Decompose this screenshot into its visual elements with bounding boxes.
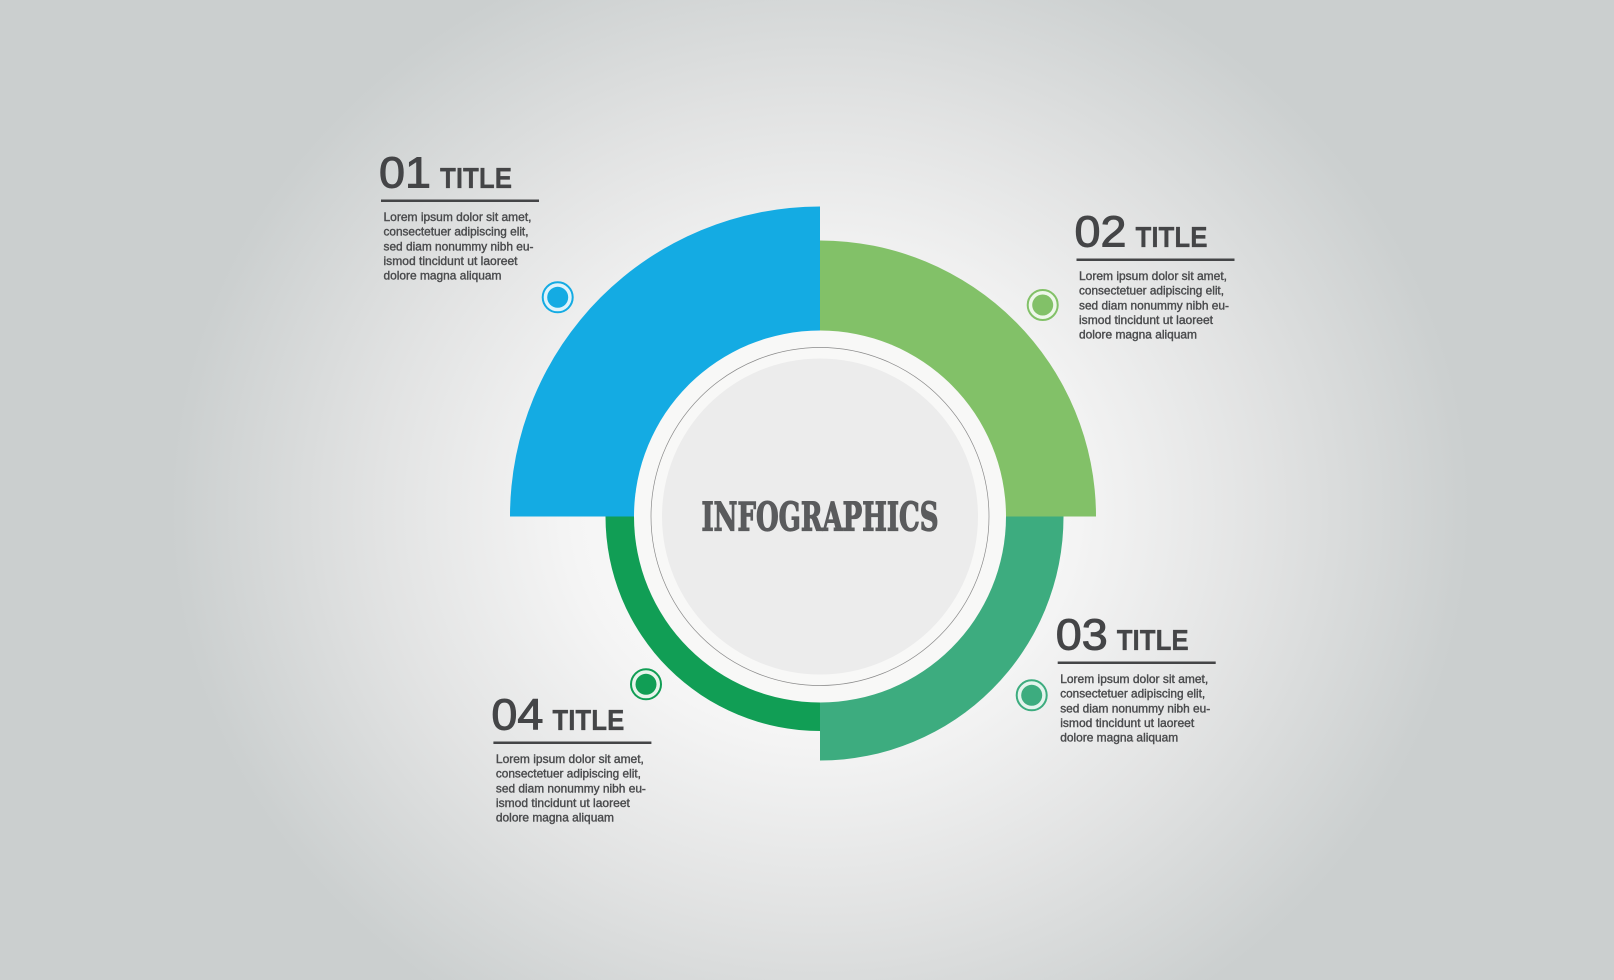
number 02: 02 (1074, 208, 1126, 256)
segment 02: light green (820, 240, 1096, 516)
body 03: ismod tincidunt ut laoreet (1060, 716, 1195, 730)
callout 03 (1056, 610, 1216, 745)
body 01: sed diam nonummy nibh eu- (384, 239, 534, 253)
body 04 (496, 752, 646, 825)
marker 04 (631, 669, 661, 699)
number 01: 01 (379, 148, 431, 198)
segment 03: teal green (820, 516, 1064, 760)
center title: INFOGRAPHICS (702, 494, 938, 540)
center thin ring (651, 348, 989, 686)
body 03: dolore magna aliquam (1060, 731, 1178, 745)
body 04: consectetuer adipiscing elit, (496, 767, 641, 781)
body 01: consectetuer adipiscing elit, (384, 225, 528, 239)
body 04: dolore magna aliquam (496, 811, 614, 825)
body 01: Lorem ipsum dolor sit amet, (384, 210, 532, 224)
center white disc (634, 330, 1006, 702)
body 02: Lorem ipsum dolor sit amet, (1079, 269, 1227, 283)
body 02: dolore magna aliquam (1079, 328, 1197, 342)
callout 02 (1074, 208, 1234, 342)
title 01: TITLE (440, 163, 512, 195)
callout 04 (491, 690, 651, 825)
body 01: ismod tincidunt ut laoreet (384, 254, 518, 268)
segment 04: dark green (606, 516, 820, 731)
marker 02 (1028, 290, 1058, 320)
body 02: sed diam nonummy nibh eu- (1079, 298, 1229, 312)
body 02 (1079, 269, 1229, 342)
callout 01 (379, 148, 539, 283)
number 03: 03 (1056, 610, 1108, 660)
body 02: ismod tincidunt ut laoreet (1079, 313, 1214, 327)
center grey disc (662, 358, 978, 674)
title 03: TITLE (1117, 625, 1189, 657)
number 04: 04 (491, 690, 543, 740)
body 04: ismod tincidunt ut laoreet (496, 796, 631, 810)
circular chart (510, 206, 1096, 760)
body 03: consectetuer adipiscing elit, (1060, 687, 1205, 701)
segment 01: blue (510, 206, 820, 516)
body 04: Lorem ipsum dolor sit amet, (496, 752, 644, 766)
body 03: sed diam nonummy nibh eu- (1060, 701, 1210, 715)
title 04: TITLE (552, 705, 624, 737)
body 01 (384, 210, 534, 283)
marker 03 (1017, 680, 1047, 710)
body 02: consectetuer adipiscing elit, (1079, 284, 1224, 298)
title 02: TITLE (1136, 222, 1208, 254)
body 01: dolore magna aliquam (384, 269, 502, 283)
body 03 (1060, 672, 1210, 745)
marker 01 (543, 282, 573, 312)
body 04: sed diam nonummy nibh eu- (496, 781, 646, 795)
body 03: Lorem ipsum dolor sit amet, (1060, 672, 1208, 686)
